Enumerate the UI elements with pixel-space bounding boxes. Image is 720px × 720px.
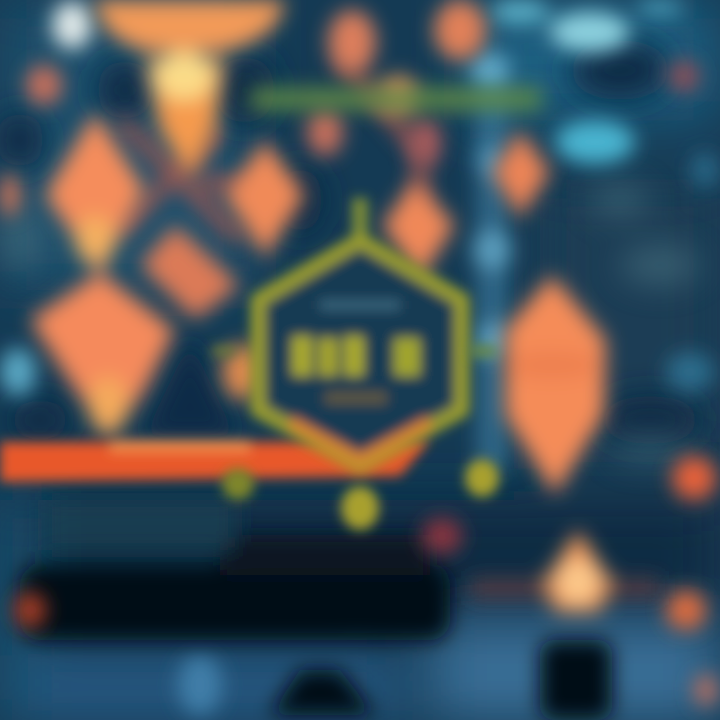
flame glow lower right [470, 530, 660, 612]
red lattice links [120, 60, 420, 240]
dark mottled patches [0, 40, 700, 444]
hexagon badge [258, 198, 462, 466]
small yellow nodes [212, 346, 499, 530]
dark panel lower left [20, 500, 450, 640]
dark figures [145, 340, 612, 720]
grey mottled patches [0, 184, 700, 462]
badge text block [292, 300, 420, 404]
green title bar [250, 88, 542, 110]
orange banner [0, 440, 430, 482]
